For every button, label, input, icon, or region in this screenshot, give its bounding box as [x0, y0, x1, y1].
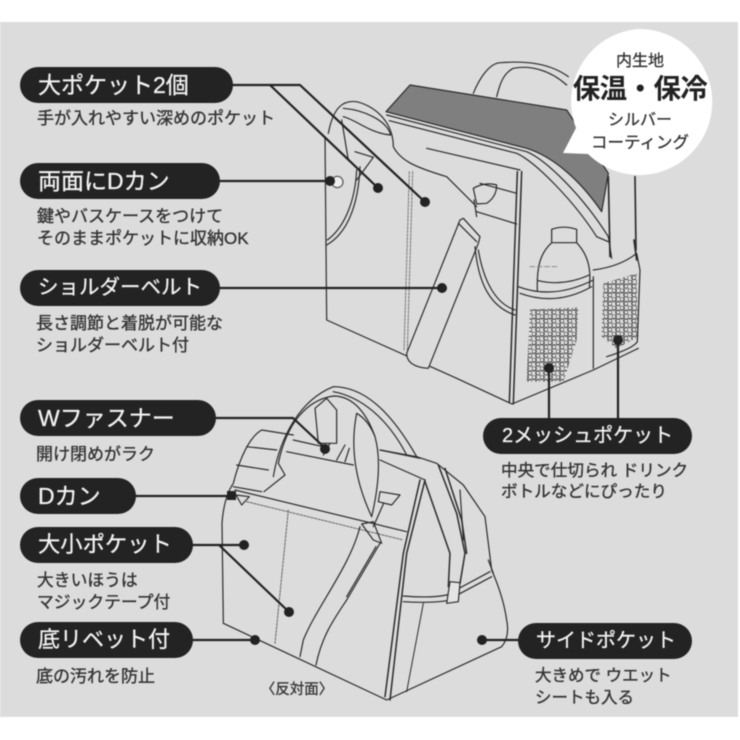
description: large and small pockets: 大きいほうは	[37, 571, 138, 590]
label: W zipper	[20, 400, 216, 436]
speech bubble	[563, 29, 712, 175]
label: two mesh pockets	[483, 418, 692, 454]
description: shoulder belt	[36, 314, 223, 354]
illustration: back view of bag	[325, 62, 640, 404]
leader: bottom rivets	[190, 635, 260, 645]
label: large and small pockets	[20, 527, 193, 563]
callout: silver coating bubble text: シルバー	[608, 112, 672, 129]
side panel	[425, 465, 467, 587]
description: large and small pockets: マジックテープ付	[37, 592, 170, 612]
label: shoulder belt	[20, 270, 220, 306]
description: large and small pockets	[37, 570, 170, 612]
leader: mesh pockets	[544, 335, 623, 420]
stitching	[404, 172, 413, 350]
callout: silver coating bubble text: コーティング	[591, 134, 689, 152]
description: side pocket	[535, 666, 672, 706]
label: D-ring	[20, 478, 136, 514]
back right strap	[608, 177, 637, 260]
callout: silver coating bubble text: 保温・保冷	[573, 73, 707, 104]
label: large and small pockets: 大小ポケット	[38, 532, 172, 557]
zipper line	[235, 490, 407, 532]
description: side pocket: 大きめで ウエット	[535, 667, 672, 685]
description: W zipper: 開け閉めがラク	[36, 445, 155, 464]
illustration: reverse side of bag	[222, 387, 508, 700]
label: D-rings on both sides: 両面にDカン	[38, 168, 170, 194]
description: two mesh pockets: 中央で仕切られ ドリンク	[501, 461, 688, 480]
leader: D-ring	[134, 491, 236, 500]
D-ring side	[332, 176, 343, 188]
bag body outline	[325, 137, 638, 404]
caption: reverse side: 〈反対面〉	[261, 682, 333, 698]
D-ring and shoulder strap	[473, 183, 517, 224]
front handle and flap	[328, 101, 477, 207]
top edges	[287, 440, 425, 480]
label: W zipper: Wファスナー	[38, 405, 175, 431]
front mesh pocket	[527, 307, 578, 382]
back handle	[473, 62, 568, 97]
left pocket curve	[327, 167, 360, 245]
handles	[264, 387, 417, 492]
leader: W zipper	[214, 418, 330, 454]
label: large pockets: 大ポケット2個	[38, 72, 189, 98]
description: shoulder belt: ショルダーベルト付	[36, 336, 189, 354]
front corner	[385, 480, 425, 700]
description: D-rings on both sides: 鍵やバスケースをつけて	[37, 207, 223, 226]
label: two mesh pockets: 2メッシュポケット	[502, 425, 673, 447]
D-ring	[236, 495, 249, 505]
callout: silver coating bubble text	[572, 52, 708, 152]
bottle	[537, 227, 590, 291]
description: two mesh pockets: ボトルなどにぴったり	[501, 482, 667, 500]
leader: shoulder belt	[218, 283, 447, 293]
zipper pulls	[315, 398, 349, 462]
leader: large and small pockets	[190, 540, 294, 617]
stitching	[275, 510, 288, 643]
body outline	[222, 430, 508, 700]
label: bottom rivets: 底リベット付	[38, 627, 170, 652]
right pocket curve	[475, 247, 515, 315]
description: D-rings on both sides	[36, 206, 249, 248]
label: D-rings on both sides	[20, 163, 220, 199]
gusset stripes	[233, 447, 277, 492]
description: shoulder belt: 長さ調節と着脱が可能な	[36, 314, 223, 333]
label: large pockets	[20, 67, 233, 103]
leader: large pockets	[230, 85, 430, 207]
callout: silver coating bubble text: 内生地	[616, 53, 664, 70]
leader: side pocket	[477, 635, 520, 645]
label: D-ring: Dカン	[38, 483, 101, 509]
label: bottom rivets	[20, 622, 193, 658]
label: side pocket: サイドポケット	[536, 630, 676, 652]
description: large pockets: 手が入れやすい深めのポケット	[37, 109, 275, 128]
label: side pocket	[518, 623, 692, 659]
description: side pocket: シートも入る	[535, 688, 634, 706]
label: shoulder belt: ショルダーベルト	[38, 276, 202, 299]
leader: D-rings on both sides	[218, 176, 335, 186]
description: two mesh pockets	[501, 461, 688, 500]
grey insulated lining	[386, 85, 608, 212]
description: bottom rivets: 底の汚れを防止	[36, 667, 155, 686]
side mesh pocket	[602, 273, 638, 348]
shoulder strap	[300, 527, 380, 665]
description: D-rings on both sides: そのままポケットに収納OK	[37, 228, 249, 248]
top rim	[387, 115, 612, 258]
